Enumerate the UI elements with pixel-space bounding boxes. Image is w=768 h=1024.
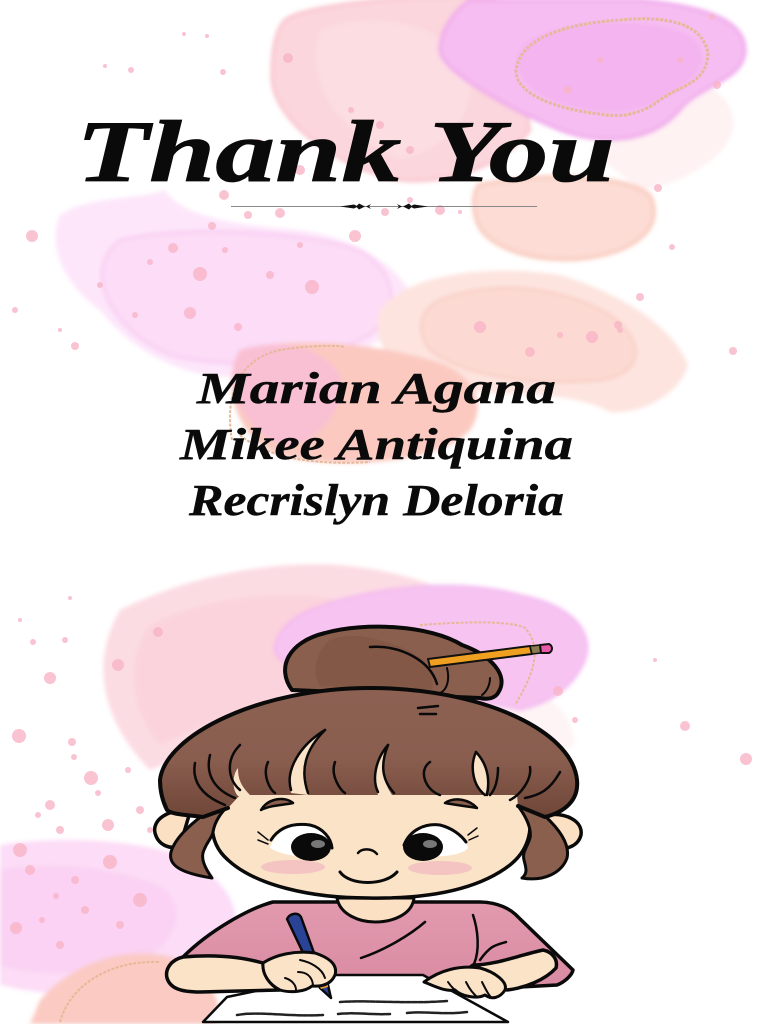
left ear <box>155 811 190 847</box>
ornamental divider <box>231 204 537 210</box>
name: Mikee Antiquina: Mikee Antiquina <box>179 420 573 469</box>
gold ring: bottom <box>60 622 535 1022</box>
watercolor washes: top section <box>56 0 745 463</box>
shirt folds <box>361 915 506 964</box>
gold ring: center <box>230 346 370 463</box>
face <box>212 785 530 898</box>
paper <box>203 975 508 1022</box>
gold ring: top <box>516 19 708 116</box>
left eye <box>258 824 332 861</box>
neck <box>337 898 414 922</box>
bangs partings <box>234 730 488 796</box>
name: Recrislyn Deloria: Recrislyn Deloria <box>188 476 564 525</box>
illustration: girl writing <box>155 627 581 1022</box>
nose <box>358 849 377 854</box>
left side hair lock <box>171 806 228 878</box>
cheeks <box>261 860 472 875</box>
hair strands <box>194 706 560 805</box>
pencil in bun <box>428 644 552 667</box>
left arm <box>167 956 280 992</box>
hair dome with bangs <box>160 688 577 817</box>
name: Marian Agana: Marian Agana <box>196 364 556 413</box>
hair bun <box>285 627 502 699</box>
writing hand <box>263 952 336 992</box>
right arm <box>460 950 556 990</box>
pen <box>287 914 331 998</box>
smile <box>340 872 397 882</box>
shirt <box>183 902 573 987</box>
title: Thank You <box>76 104 615 201</box>
right eye <box>403 825 478 861</box>
eyebrows <box>261 799 477 810</box>
right side hair lock <box>518 806 568 879</box>
right ear <box>545 814 581 849</box>
right hand <box>424 967 505 998</box>
watercolor washes: bottom section <box>0 564 587 1024</box>
